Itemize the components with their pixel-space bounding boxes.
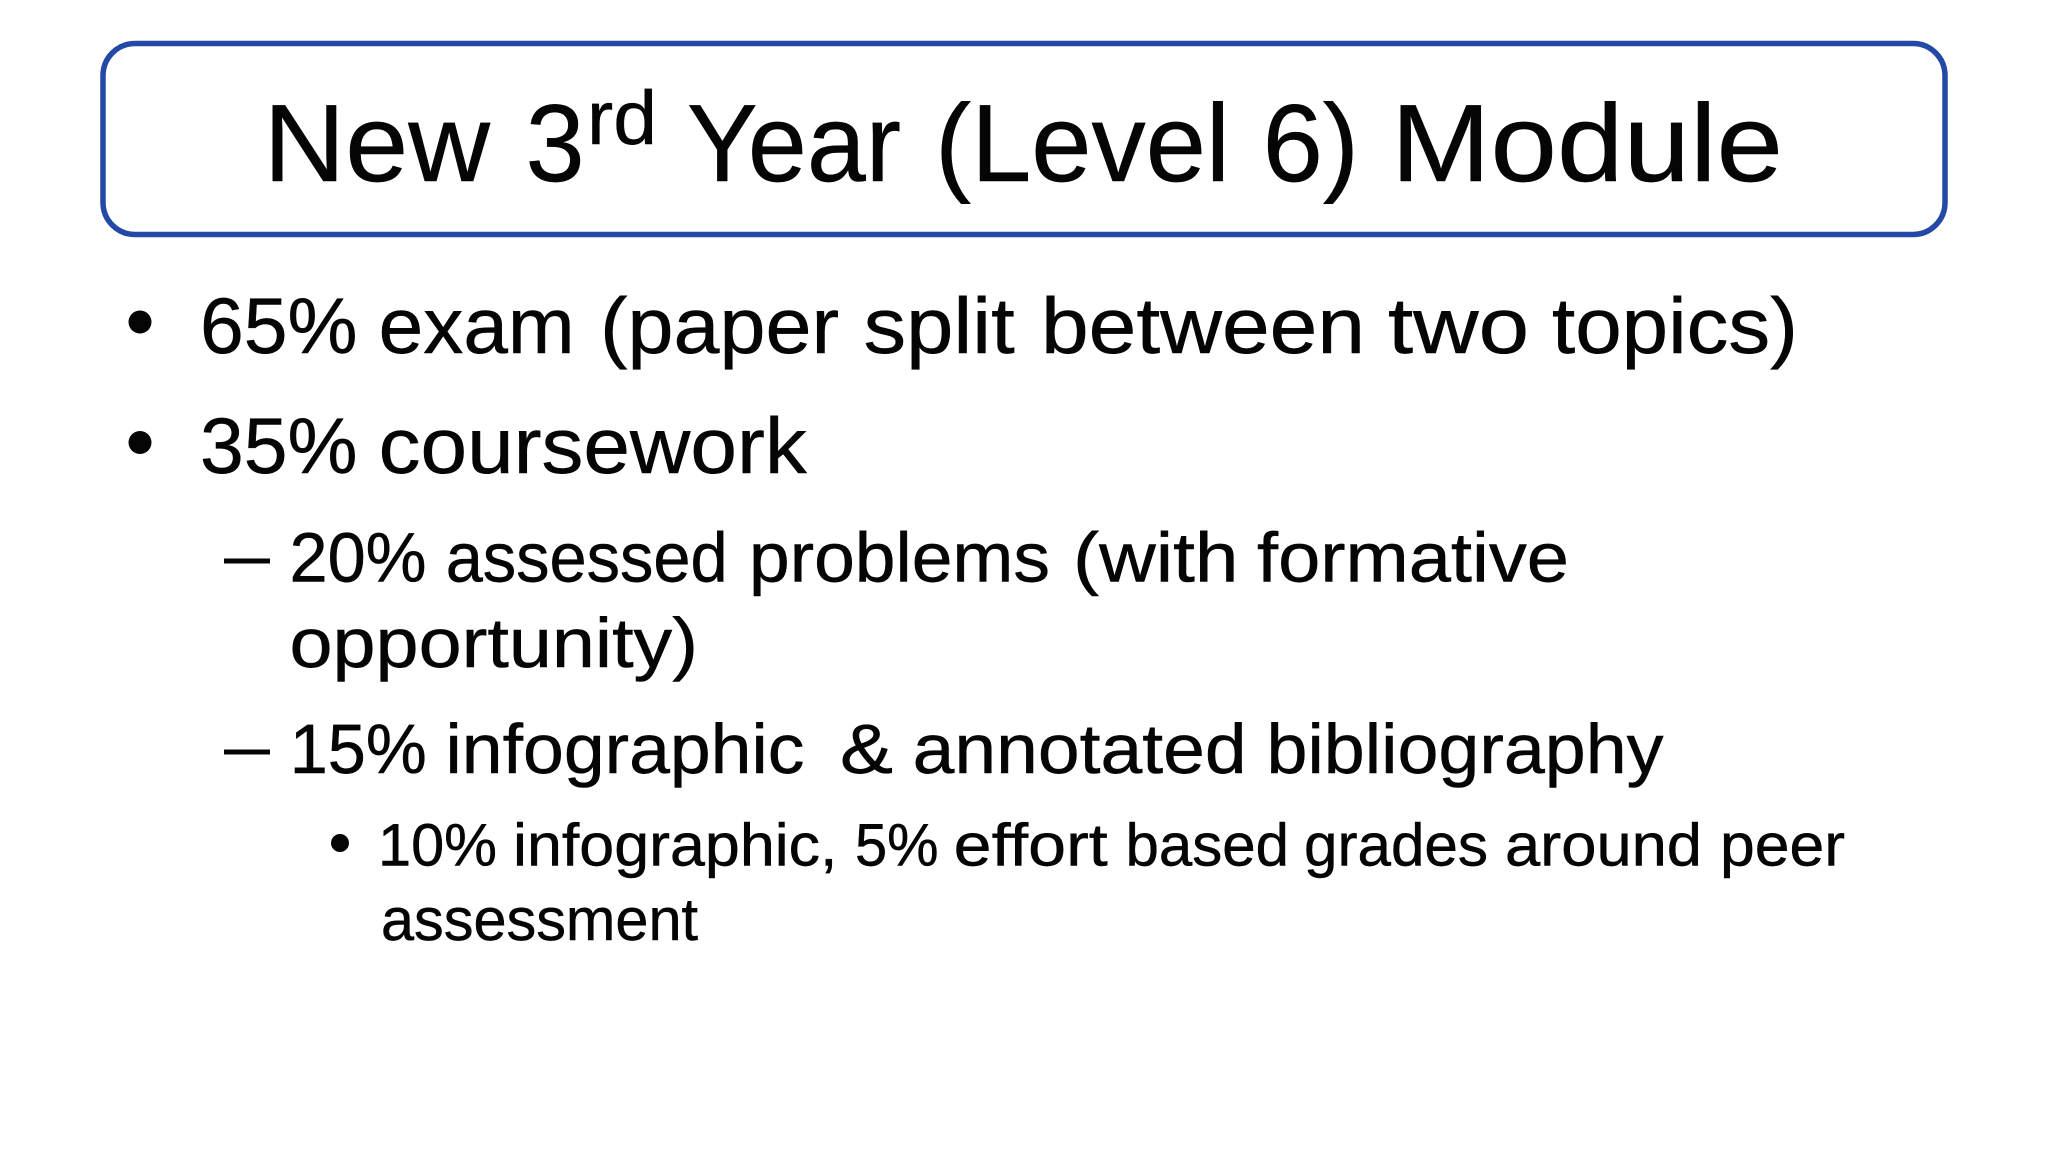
sub-sub-bullet: 10% infographic, 5% effort: 10%: [378, 812, 497, 878]
bullet: 35% coursework: coursework: [379, 401, 807, 490]
sub-bullet: 20% assessed problems: formative: [1257, 518, 1569, 596]
sub-bullet: 20% assessed problems: [224, 518, 1569, 682]
sub-sub-bullet: 10% infographic, 5% effort: peer: [1720, 812, 1845, 878]
title panel: [103, 44, 1945, 234]
sub-sub-bullet: 10% infographic, 5% effort: [331, 812, 1845, 953]
sub-sub-bullet: 10% infographic, 5% effort: assessment: [381, 886, 698, 953]
title text: rd: [587, 76, 657, 161]
bullet list: [128, 281, 1845, 953]
sub-bullet: 20% assessed problems: (with: [1073, 518, 1238, 596]
sub-bullet: 15% infographic and annotated bibliography: bibliography: [1266, 710, 1664, 788]
sub-bullet: 20% assessed problems: 20%: [290, 518, 426, 596]
title text: 3: [526, 82, 585, 205]
sub-sub-bullet: 10% infographic, 5% effort: based: [1126, 812, 1289, 878]
bullet: 65% exam: two: [1388, 281, 1529, 370]
bullet: 35% coursework: [128, 401, 807, 490]
bullet: 65% exam: 65%: [200, 281, 358, 370]
bullet: 65% exam: between: [1041, 281, 1365, 370]
title text: Module: [1391, 82, 1783, 205]
bullet: 35% coursework: 35%: [200, 401, 358, 490]
sub-bullet: 15% infographic and annotated bibliography: 15%: [290, 710, 427, 788]
bullet: 65% exam: exam: [379, 281, 575, 370]
bullet: 65% exam: split: [864, 281, 1015, 370]
sub-bullet: 20% assessed problems: assessed: [446, 518, 728, 596]
bullet: 65% exam: [128, 281, 1798, 370]
title text: New: [264, 82, 491, 205]
sub-sub-bullet: 10% infographic, 5% effort: effort: [954, 812, 1108, 878]
title text: (Level: [935, 82, 1230, 205]
sub-sub-bullet: 10% infographic, 5% effort: grades: [1304, 812, 1488, 878]
sub-bullet: 15% infographic and annotated bibliography: [224, 710, 1664, 788]
sub-bullet: 15% infographic and annotated bibliography: infographic: [446, 710, 804, 788]
sub-bullet: 15% infographic and annotated bibliography: annotated: [913, 710, 1247, 788]
title text: [264, 76, 1783, 205]
sub-sub-bullet: 10% infographic, 5% effort: 5%: [855, 812, 939, 878]
bullet: 65% exam: (paper: [600, 281, 839, 370]
title border: [103, 44, 1945, 234]
sub-bullet: 15% infographic and annotated bibliography: &: [840, 710, 893, 788]
title text: Year: [687, 82, 901, 205]
bullet: 65% exam: topics): [1552, 281, 1798, 370]
title text: 6): [1263, 82, 1359, 205]
sub-sub-bullet: 10% infographic, 5% effort: around: [1505, 812, 1702, 878]
sub-bullet: 20% assessed problems: opportunity): [290, 604, 698, 682]
sub-sub-bullet: 10% infographic, 5% effort: infographic,: [513, 812, 838, 878]
sub-bullet: 20% assessed problems: problems: [749, 518, 1050, 596]
